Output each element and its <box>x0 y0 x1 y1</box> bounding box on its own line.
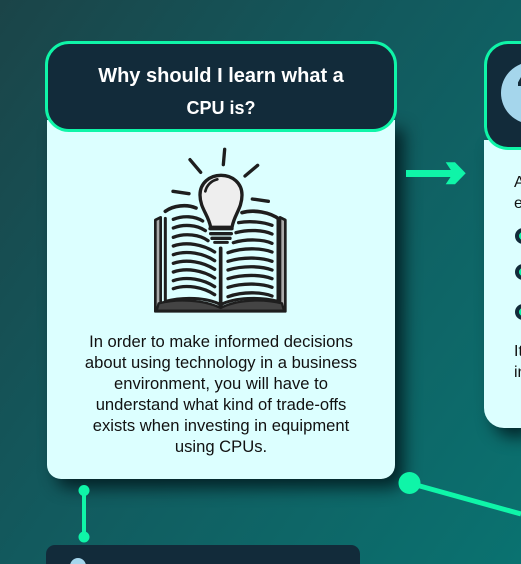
heading panel: right card header <box>484 41 521 150</box>
icon: circle badge <box>501 62 521 124</box>
panel: next section header <box>46 545 360 564</box>
bullet marker one <box>515 228 521 244</box>
icon: small badge <box>70 558 86 564</box>
text: why learn explanation: about using technology in a business <box>85 353 357 372</box>
text: why learn explanation: In order to make informed decisions <box>89 332 353 351</box>
icon: badge glyph <box>518 77 521 86</box>
connector: vertical link down <box>78 485 90 542</box>
heading panel: why learn: Why should I learn what a <box>98 65 344 87</box>
panel: why learn card body <box>47 120 395 479</box>
connector: diagonal link right <box>398 472 521 516</box>
text: right card closing <box>514 343 521 381</box>
panel: definition card on right <box>484 140 521 428</box>
text: why learn explanation <box>85 332 357 456</box>
text: right card intro <box>514 174 521 212</box>
bullet marker three <box>515 304 521 320</box>
text: why learn explanation: understand what kind of trade-offs <box>96 395 346 414</box>
text: why learn explanation: exists when investing in equipment <box>93 416 349 435</box>
text: why learn explanation: using CPUs. <box>175 437 267 456</box>
icon: book with light bulb <box>154 148 287 313</box>
heading panel: why learn <box>45 41 397 132</box>
arrow: to right card <box>406 162 466 184</box>
heading panel: why learn: CPU is? <box>186 98 256 118</box>
text: why learn explanation: environment, you will have to <box>114 374 328 393</box>
bullet marker two <box>515 264 521 280</box>
